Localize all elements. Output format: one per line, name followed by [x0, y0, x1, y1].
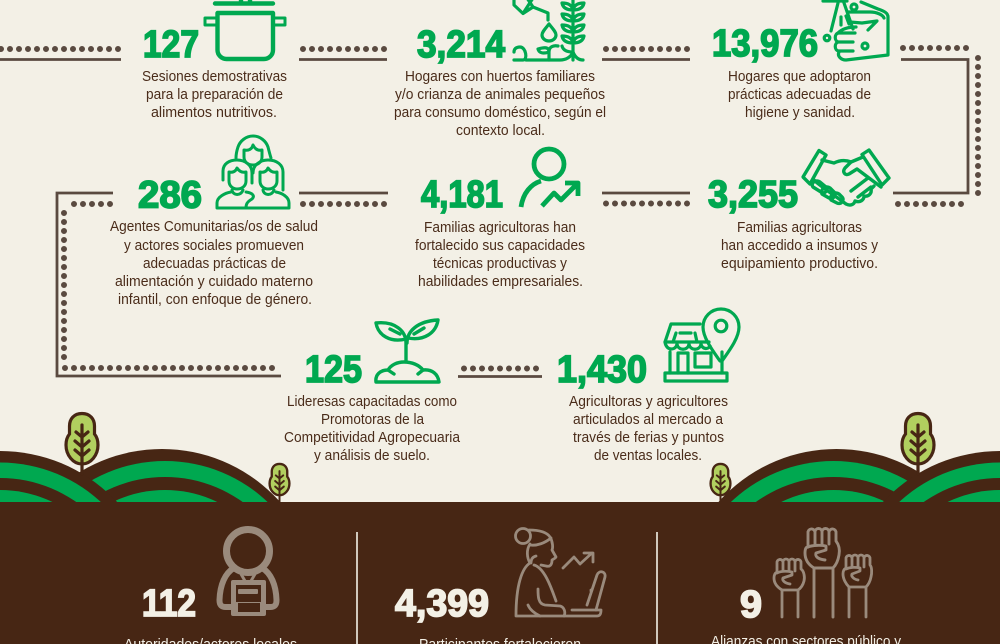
description: para consumo doméstico, según el [394, 105, 606, 121]
connector: row three middle [458, 368, 542, 376]
panel: lideresas capacitadas [284, 320, 461, 464]
number: 13,976 [712, 23, 818, 65]
panel: bottom band [0, 502, 1000, 644]
connector: row two middle 2 [602, 193, 690, 204]
description: través de ferias y puntos [573, 430, 724, 446]
connector: left bend [57, 193, 281, 376]
description: y análisis de suelo. [314, 448, 430, 464]
icon: person with growth arrow [521, 149, 578, 207]
description: Lideresas capacitadas como [287, 394, 457, 410]
description [728, 69, 871, 121]
description: higiene y sanidad. [745, 105, 855, 121]
connector: top middle 2 [602, 49, 690, 60]
description: de ventas locales. [594, 448, 702, 464]
description: fortalecido sus capacidades [415, 238, 585, 254]
number: 3,214 [417, 24, 505, 66]
description: para la preparación de [146, 87, 283, 103]
number: 9 [740, 584, 762, 626]
number: 125 [305, 349, 362, 391]
number: 127 [143, 24, 199, 66]
stat: autoridades [124, 530, 297, 644]
icon: raised fists [774, 528, 872, 617]
description [142, 69, 287, 121]
description: Agentes Comunitarias/os de salud [110, 219, 318, 235]
icon: handshake [803, 150, 889, 205]
icon: small tree left [270, 464, 289, 503]
description: han accedido a insumos y [721, 238, 879, 254]
panel: agentes comunitarias [110, 136, 318, 308]
panel: articulados al mercado [557, 309, 739, 464]
connector: row two middle 1 [299, 193, 388, 204]
description: Promotoras de la [321, 412, 425, 428]
icon: hand washing [823, 0, 888, 60]
description: técnicas productivas y [433, 256, 568, 272]
description [110, 219, 318, 308]
description [394, 69, 606, 139]
description: y actores sociales promueven [124, 238, 304, 254]
description: Competitividad Agropecuaria [284, 430, 461, 446]
panel: sesiones demostrativas [142, 0, 287, 121]
description: alimentos nutritivos. [151, 105, 277, 121]
icon: woman with laptop and growth arrow [516, 528, 605, 616]
icon: watering can and plants [514, 0, 584, 60]
number: 4,181 [421, 174, 503, 216]
connector: right bend [893, 48, 978, 204]
right hills [718, 449, 1000, 502]
number: 1,430 [557, 349, 647, 391]
connector: top left [0, 49, 121, 60]
description: Familias agricultoras han [424, 220, 576, 236]
panel: capacidades técnicas [415, 149, 585, 290]
description: articulados al mercado a [573, 412, 724, 428]
description: Agricultoras y agricultores [569, 394, 728, 410]
description: Sesiones demostrativas [142, 69, 287, 85]
icon: cooking pot [205, 0, 285, 59]
icon: seedling [376, 320, 439, 382]
icon: three women [217, 136, 289, 208]
description: Hogares que adoptaron [728, 69, 871, 85]
number: 3,255 [708, 174, 798, 216]
description [569, 394, 728, 464]
number: 4,399 [395, 583, 489, 625]
connector: top middle 1 [299, 49, 387, 60]
description [721, 220, 879, 272]
icon: market stall with map pin [665, 309, 739, 381]
description [284, 394, 461, 464]
description: Hogares con huertos familiares [405, 69, 595, 85]
description: alimentación y cuidado materno [115, 274, 313, 290]
panel: higiene y sanidad [712, 0, 888, 121]
number: 286 [138, 174, 202, 216]
panel: insumos y equipamiento [708, 150, 889, 272]
left hills [0, 449, 278, 502]
description: y/o crianza de animales pequeños [395, 87, 605, 103]
description: contexto local. [456, 123, 545, 139]
description: prácticas adecuadas de [728, 87, 871, 103]
icon: large tree right [902, 414, 934, 474]
description: Familias agricultoras [737, 220, 862, 236]
icon: large tree left [66, 414, 98, 474]
panel: huertos familiares [394, 0, 606, 139]
description [415, 220, 585, 290]
description: habilidades empresariales. [418, 274, 583, 290]
description: equipamiento productivo. [721, 256, 878, 272]
description: adecuadas prácticas de [143, 256, 286, 272]
icon: small tree right [711, 464, 730, 503]
description: infantil, con enfoque de género. [118, 292, 312, 308]
number: 112 [142, 583, 196, 625]
icon: person with badge [220, 530, 276, 616]
stat: alianzas [711, 528, 902, 644]
stat: participantes [395, 528, 605, 644]
